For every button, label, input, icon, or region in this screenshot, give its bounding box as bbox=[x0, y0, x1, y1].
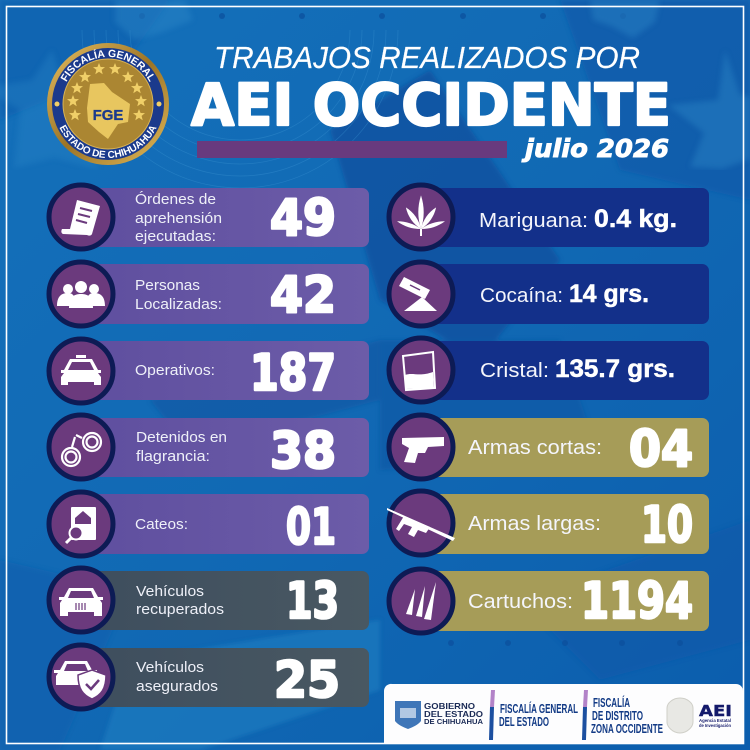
stat: vehículos recuperados: 13 bbox=[286, 572, 339, 630]
stat: operativos: Operativos: bbox=[135, 362, 215, 379]
stat: órdenes de aprehensión: 49 bbox=[270, 189, 336, 247]
purple divider bbox=[197, 141, 507, 158]
stat: órdenes de aprehensión: Órdenes de bbox=[135, 191, 216, 208]
logo: AEI: de Investigación bbox=[699, 723, 731, 728]
logo: AEI: Agencia Estatal bbox=[699, 718, 731, 723]
stat: detenidos en flagrancia: flagrancia: bbox=[136, 448, 210, 465]
title line: TRABAJOS REALIZADOS POR bbox=[214, 40, 640, 75]
stat: cocaína: 14 grs. bbox=[569, 280, 649, 308]
stat: vehículos recuperados: Vehículos bbox=[136, 583, 204, 600]
stat: cristal: Cristal: bbox=[480, 360, 549, 382]
stat: armas cortas: 04 bbox=[629, 420, 693, 478]
stat: vehículos recuperados bbox=[49, 568, 369, 632]
stat: cartuchos: 1194 bbox=[581, 572, 693, 630]
logo: gobierno del estado: DEL ESTADO bbox=[424, 709, 483, 719]
stat: detenidos en flagrancia: Detenidos en bbox=[136, 429, 227, 446]
icon: razor and powder bbox=[399, 277, 437, 311]
icon: pistol bbox=[402, 437, 444, 463]
stat: armas largas: 10 bbox=[641, 496, 693, 554]
ripple lines bbox=[82, 30, 398, 188]
stat: personas localizadas: 42 bbox=[270, 266, 336, 324]
icon: cannabis leaf bbox=[396, 195, 446, 236]
stat: mariguana bbox=[389, 185, 709, 249]
stat: cateos: 01 bbox=[286, 498, 336, 556]
icon: baggie bbox=[403, 352, 435, 390]
logo: Fiscalía General: FGE bbox=[93, 107, 123, 124]
stat: personas localizadas bbox=[49, 262, 369, 326]
stat: vehículos asegurados: 25 bbox=[274, 651, 340, 709]
text: fiscalía de distrito: DE DISTRITO bbox=[592, 709, 643, 723]
stat: armas largas: Armas largas: bbox=[468, 513, 601, 535]
stat: vehículos asegurados bbox=[49, 645, 369, 709]
dots bbox=[139, 13, 683, 646]
text: fiscalía general bbox=[499, 701, 578, 729]
divider bbox=[490, 690, 495, 707]
ring text: ESTADO DE CHIHUAHUA bbox=[60, 124, 157, 158]
stars bbox=[54, 63, 162, 120]
stat: cateos: Cateos: bbox=[135, 516, 188, 533]
text: fiscalía general: DEL ESTADO bbox=[499, 714, 549, 729]
stat: personas localizadas: Personas bbox=[135, 277, 200, 294]
icon: bullets bbox=[406, 582, 436, 620]
icon: people bbox=[57, 281, 105, 308]
footer logos panel bbox=[384, 684, 743, 743]
stat: órdenes de aprehensión bbox=[49, 185, 369, 249]
stat: mariguana: 0.4 kg. bbox=[594, 205, 677, 233]
logo: AEI: AEI bbox=[699, 702, 732, 720]
stat: cristal: 135.7 grs. bbox=[555, 355, 675, 383]
logo: AEI bbox=[667, 698, 732, 733]
state map bbox=[87, 83, 130, 139]
logo: Fiscalía General bbox=[47, 43, 169, 165]
icon: police car bbox=[61, 355, 101, 385]
icon: car front bbox=[59, 588, 103, 616]
icon: car with shield bbox=[54, 661, 106, 699]
stat: cartuchos: Cartuchos: bbox=[468, 591, 573, 613]
stat: cristal bbox=[389, 338, 709, 402]
text: fiscalía de distrito bbox=[591, 695, 663, 736]
stat: cateos bbox=[49, 492, 369, 556]
icon: search warrant bbox=[66, 507, 96, 543]
text: fiscalía general: FISCALÍA GENERAL bbox=[500, 701, 578, 716]
date: julio 2026 bbox=[521, 134, 669, 163]
stat: órdenes de aprehensión: aprehensión bbox=[135, 210, 222, 227]
stat: vehículos recuperados: recuperados bbox=[136, 601, 224, 618]
stat: vehículos asegurados: Vehículos bbox=[136, 659, 204, 676]
main heading: AEI OCCIDENTE bbox=[191, 71, 671, 139]
text: fiscalía de distrito: ZONA OCCIDENTE bbox=[591, 722, 663, 736]
stat: operativos: 187 bbox=[250, 344, 336, 402]
stat: órdenes de aprehensión: ejecutadas: bbox=[135, 228, 216, 245]
light stars bbox=[0, 0, 750, 170]
icon: rifle bbox=[387, 508, 455, 541]
stat: armas largas bbox=[387, 491, 709, 555]
stat: cartuchos bbox=[389, 569, 709, 633]
divider bbox=[583, 690, 588, 707]
stat: detenidos en flagrancia: 38 bbox=[270, 422, 336, 480]
logo: gobierno del estado bbox=[395, 701, 483, 729]
stat: personas localizadas: Localizadas: bbox=[135, 296, 222, 313]
icon: handcuffs bbox=[62, 433, 101, 466]
stat: detenidos en flagrancia bbox=[49, 415, 369, 480]
stat: cocaína bbox=[389, 262, 709, 326]
ring text: FISCALÍA GENERAL bbox=[60, 49, 154, 82]
ring text bbox=[60, 49, 157, 158]
stat: vehículos asegurados: asegurados bbox=[136, 678, 218, 695]
stat: armas cortas: Armas cortas: bbox=[468, 437, 602, 459]
icon: document bbox=[61, 200, 100, 236]
text: fiscalía de distrito: FISCALÍA bbox=[593, 695, 630, 710]
stat: mariguana: Mariguana: bbox=[479, 210, 588, 232]
stat: cocaína: Cocaína: bbox=[480, 285, 563, 307]
stat: operativos bbox=[49, 339, 369, 403]
stat: armas cortas bbox=[389, 415, 709, 479]
logo: gobierno del estado: DE CHIHUAHUA bbox=[424, 719, 483, 726]
logo: gobierno del estado: GOBIERNO bbox=[424, 701, 475, 711]
